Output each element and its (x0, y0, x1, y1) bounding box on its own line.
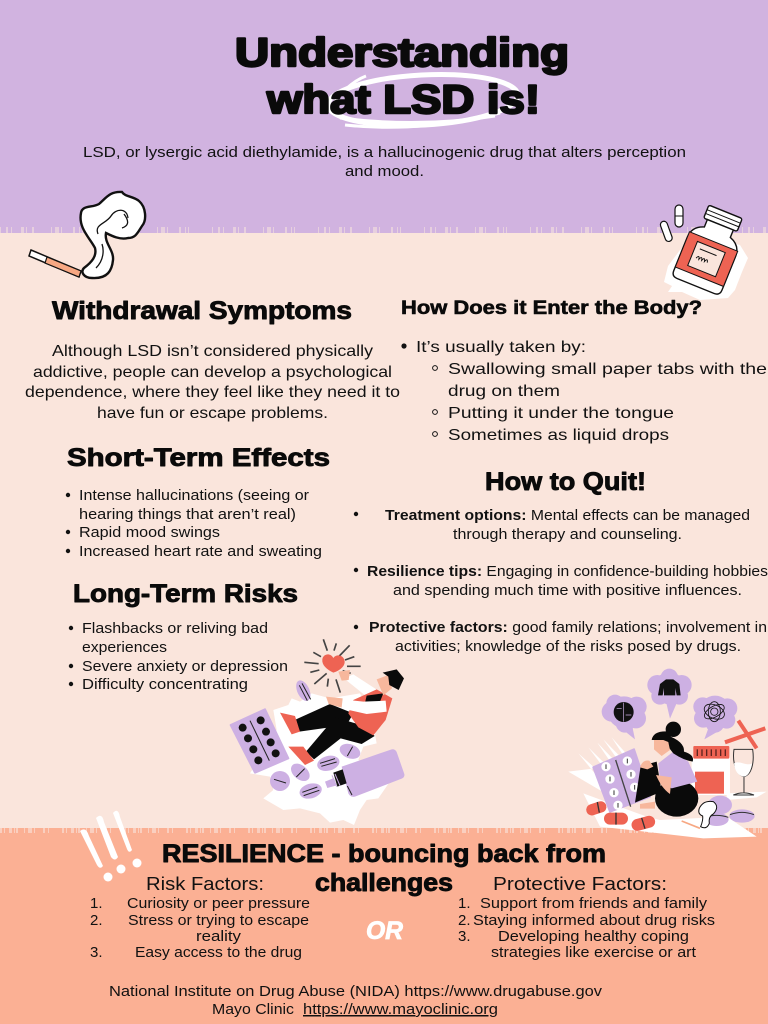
intro text (83, 144, 686, 180)
panel: risk factors: 3. (90, 944, 103, 961)
list: long-term risks: Difficulty concentrating (82, 677, 248, 693)
intro text: LSD, or lysergic acid diethylamide, is a hallucinogenic drug that alters perception (83, 144, 686, 161)
list: how to quit: and spending much time with positive influences. (393, 583, 742, 599)
panel: protective factors (458, 874, 715, 961)
text: withdrawal paragraph: have fun or escape problems. (97, 405, 328, 422)
panel: protective factors: Staying informed about drug risks (473, 912, 715, 929)
text: OR: OR (366, 917, 403, 945)
list: how it enters the body: Putting it under the tongue (448, 405, 674, 422)
list: how to quit: Resilience tips: Engaging in confidence-building hobbies (367, 564, 768, 580)
heading: how to quit: How to Quit! (485, 468, 646, 496)
list: how it enters the body: Sometimes as liquid drops (448, 427, 669, 444)
heading: resilience: RESILIENCE - bouncing back from (162, 840, 606, 868)
list: long-term risks: experiences (82, 640, 167, 656)
heading: resilience: challenges (315, 869, 453, 897)
heading: long-term risks: Long-Term Risks (73, 580, 298, 608)
list: how to quit (354, 508, 768, 655)
list: how to quit: Protective factors: good family relations; involvement in (369, 620, 767, 636)
heading: short-term effects: Short-Term Effects (67, 444, 330, 472)
list: short-term effects: Increased heart rate and sweating (79, 544, 322, 560)
list: long-term risks: Flashbacks or reliving bad (82, 621, 268, 637)
text: withdrawal paragraph: addictive, people can develop a psychological (33, 364, 392, 381)
list: how it enters the body: It’s usually taken by: (416, 339, 586, 356)
icon: pill bottle (659, 202, 750, 300)
icon: exclamation marks (80, 811, 142, 882)
list: how to quit: activities; knowledge of the risks posed by drugs. (395, 639, 741, 655)
sources (109, 983, 603, 1018)
panel: risk factors: Easy access to the drug (135, 944, 302, 961)
heading: resilience (162, 840, 606, 897)
intro text: and mood. (345, 163, 424, 180)
panel: protective factors: Developing healthy coping (498, 928, 689, 945)
list: long-term risks: Severe anxiety or depression (82, 659, 288, 675)
text: withdrawal paragraph: dependence, where they feel like they need it to (25, 384, 400, 401)
list: how to quit: Treatment options: Mental effects can be managed (385, 508, 750, 524)
list: short-term effects: hearing things that aren’t real) (79, 507, 296, 523)
panel: risk factors: 1. (90, 895, 103, 912)
thought bubble: tangled thoughts (693, 696, 737, 739)
text: withdrawal paragraph: Although LSD isn’t considered physically (52, 343, 373, 360)
heading: withdrawal symptoms: Withdrawal Symptoms (52, 297, 352, 325)
list: how it enters the body: drug on them (448, 383, 560, 400)
title: Understanding (235, 31, 569, 75)
panel: risk factors: Curiosity or peer pressure (127, 895, 310, 912)
illustration: person holding heart among pills (231, 639, 404, 825)
sources: Mayo Clinic (212, 1001, 295, 1018)
illustration: woman with thought bubbles (568, 669, 767, 838)
panel: protective factors: strategies like exercise or art (491, 944, 697, 961)
panel: risk factors: 2. (90, 912, 103, 929)
panel: risk factors: Risk Factors: (146, 874, 264, 894)
panel: protective factors: 1. (458, 895, 471, 912)
panel: risk factors (90, 874, 310, 961)
sources: National Institute on Drug Abuse (NIDA) https://www.drugabuse.gov (109, 983, 603, 1000)
list: short-term effects: Intense hallucinations (seeing or (79, 488, 309, 504)
panel: protective factors: 3. (458, 928, 471, 945)
list: short-term effects: Rapid mood swings (79, 525, 220, 541)
thought bubble: brain (602, 695, 647, 739)
list: how it enters the body (401, 339, 767, 444)
panel: risk factors: reality (196, 928, 242, 945)
list: short-term effects (66, 488, 322, 560)
panel: protective factors: Support from friends and family (480, 895, 708, 912)
heading: how does it enter the body: How Does it Enter the Body? (401, 298, 702, 319)
panel: protective factors: Protective Factors: (493, 874, 667, 894)
list: long-term risks (69, 621, 288, 693)
text: withdrawal paragraph (25, 343, 400, 422)
panel: risk factors: Stress or trying to escape (128, 912, 309, 929)
title: what LSD is! (266, 78, 540, 122)
panel: protective factors: 2. (458, 912, 471, 929)
icon: cigarette and smoke (29, 192, 145, 278)
list: how it enters the body: Swallowing small paper tabs with the (448, 361, 767, 378)
thought bubble: jacket (647, 669, 692, 719)
sources: https://www.mayoclinic.org (303, 1001, 498, 1018)
title (235, 31, 569, 130)
list: how to quit: through therapy and counseling. (453, 527, 682, 543)
